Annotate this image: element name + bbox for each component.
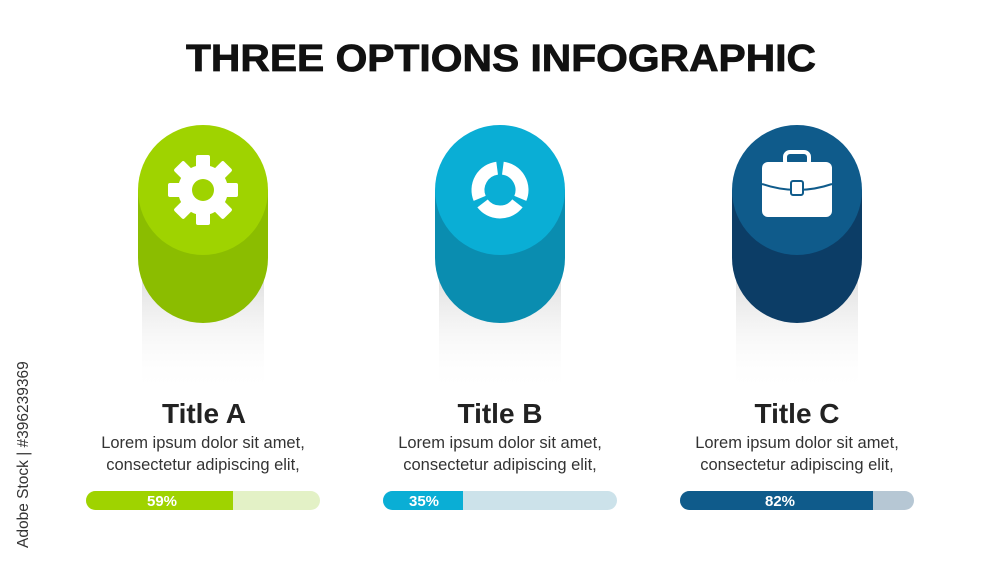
- panel C text: consectetur adipiscing elit,: [700, 456, 894, 474]
- panel C text: Lorem ipsum dolor sit amet,: [695, 434, 899, 452]
- progress bar B: [383, 491, 617, 510]
- panel A text: Lorem ipsum dolor sit amet,: [101, 434, 305, 452]
- panel B text: Lorem ipsum dolor sit amet,: [398, 434, 602, 452]
- panel C text: Title C: [754, 398, 840, 429]
- cylinder A: [138, 125, 268, 323]
- icon: gear: [168, 155, 238, 225]
- panel A text: Title A: [162, 398, 246, 429]
- panel B text: Title B: [457, 398, 543, 429]
- cylinder B: [435, 125, 565, 323]
- progress bar C: [680, 491, 914, 510]
- progress bar C: 82%: [765, 493, 795, 510]
- icon: briefcase: [762, 152, 832, 217]
- progress bar B: 35%: [409, 493, 439, 510]
- title: THREE OPTIONS INFOGRAPHIC: [186, 38, 816, 80]
- panel B text: [398, 398, 602, 474]
- panel A text: [101, 398, 305, 474]
- shadows: [142, 258, 858, 393]
- panel B text: consectetur adipiscing elit,: [403, 456, 597, 474]
- progress bar A: [86, 491, 320, 510]
- panel A text: consectetur adipiscing elit,: [106, 456, 300, 474]
- icon: cycle: [470, 167, 522, 220]
- watermark vertical text: Adobe Stock | #396239369: [15, 361, 32, 548]
- progress bar A: 59%: [147, 493, 177, 510]
- cylinder C: [732, 125, 862, 323]
- panel C text: [695, 398, 899, 474]
